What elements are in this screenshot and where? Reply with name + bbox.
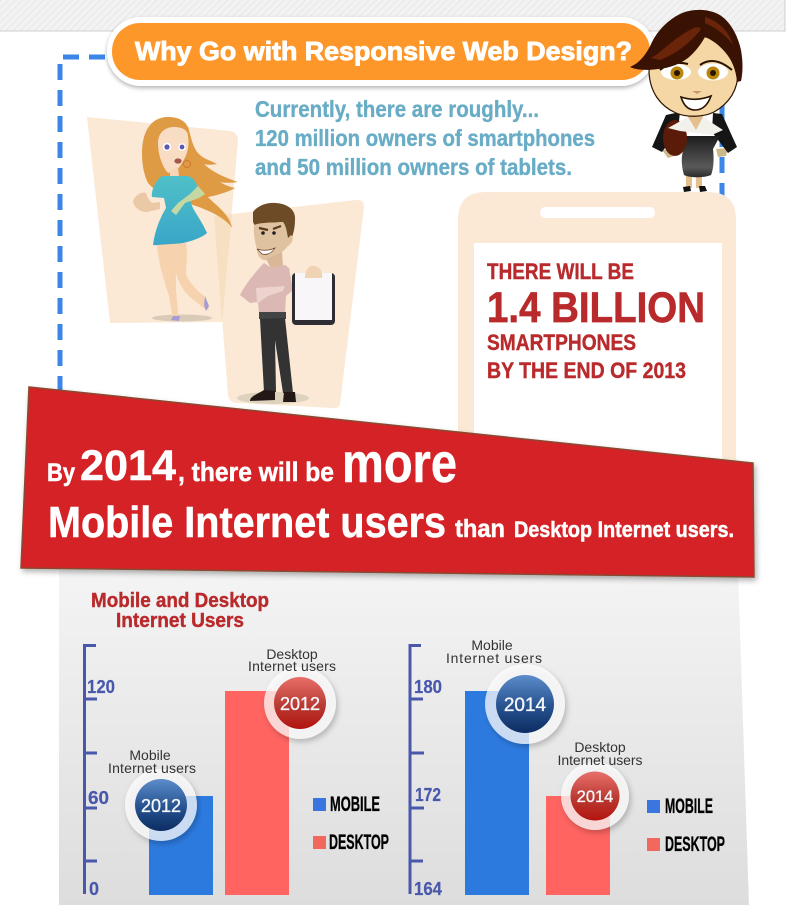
bar desktop 2012 [225,691,289,895]
legend 2014 [647,795,725,856]
badge desktop 2014 [561,762,629,830]
axis 2014: 180 [414,677,442,697]
dashed content border [60,57,722,392]
bar mobile 2014 [465,691,529,895]
axis 2014: 164 [414,879,442,899]
badge desktop 2014: 2014 [577,788,613,806]
label mobile 2014 [446,637,542,666]
bar mobile 2012 [149,796,213,895]
chart heading: Internet Users [116,610,244,632]
icon: woman mascot [630,10,742,192]
chart 2012 [84,646,389,899]
legend 2012 [313,793,389,854]
badge mobile 2012 [125,769,197,841]
intro text: 120 million owners of smartphones [255,125,595,151]
intro text: Currently, there are roughly... [255,96,539,122]
label desktop 2012 [248,646,336,674]
phone stat text: THERE WILL BE [487,259,634,284]
intro text: and 50 million owners of tablets. [255,154,572,180]
badge desktop 2012 [264,667,336,739]
banner line two: Mobile Internet users [48,498,446,547]
banner line one: more [342,431,457,494]
label desktop 2014: Internet users [558,752,642,768]
badge mobile 2012: 2012 [141,796,181,816]
icon: girl character [133,117,238,322]
legend 2012: DESKTOP [329,831,389,854]
chart heading: Mobile and Desktop [91,590,269,612]
top hatched strip [0,0,785,31]
chart panel background [59,570,749,905]
axis 2012 [84,646,115,899]
chart heading [91,590,269,632]
banner line one: , there will be [178,457,334,487]
icon: man character [237,203,335,404]
label desktop 2012: Desktop [266,646,318,662]
badge mobile 2014 [485,664,565,744]
banner line one: By [47,459,75,487]
label desktop 2014 [558,739,642,768]
label desktop 2014: Desktop [574,739,626,755]
badge desktop 2012: 2012 [280,694,320,714]
label mobile 2014: Internet users [446,650,542,666]
axis 2012: 120 [87,677,115,697]
intro text [255,96,595,180]
axis 2012: 0 [89,879,99,899]
phone stat text [487,259,705,383]
title pill [107,17,655,86]
badge mobile 2014: 2014 [504,695,547,716]
bar desktop 2014 [546,796,610,895]
banner line one [47,431,457,494]
legend 2014: DESKTOP [665,833,725,856]
banner line two [48,498,734,547]
chart 2014 [410,637,725,899]
axis 2014 [410,646,442,899]
label desktop 2012: Internet users [248,658,336,674]
banner line one: 2014 [80,442,176,490]
axis 2014: 172 [415,785,441,805]
banner line two: Desktop Internet users. [514,517,734,542]
label mobile 2012: Mobile [129,747,171,763]
label mobile 2014: Mobile [471,637,513,653]
red banner [21,387,754,577]
banner line two: than [455,515,505,543]
phone stat text: 1.4 BILLION [487,284,705,332]
phone speaker [540,207,655,218]
label mobile 2012 [108,747,196,776]
legend 2014: MOBILE [665,795,713,818]
label mobile 2012: Internet users [108,760,196,776]
legend 2012: MOBILE [330,793,380,816]
character cards [87,117,364,408]
title text: Why Go with Responsive Web Design? [135,36,632,66]
icon: tablet [292,273,335,325]
phone graphic [458,192,736,475]
phone stat text: BY THE END OF 2013 [487,358,686,383]
axis 2012: 60 [88,788,109,808]
phone stat text: SMARTPHONES [487,330,636,355]
